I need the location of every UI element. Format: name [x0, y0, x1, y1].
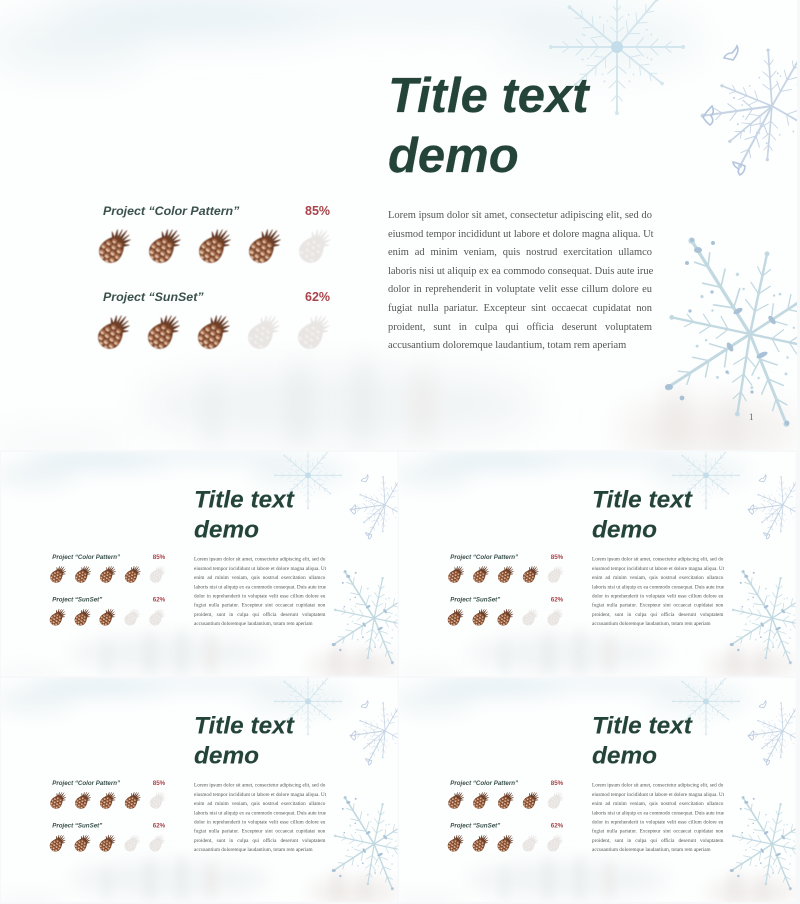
title: Title text	[592, 486, 692, 513]
text block: body copy: enim ad minim veniam, quis nostrud exercitation ullamco	[592, 801, 723, 806]
text block: body copy: fugiat nulla pariatur. Excepteur sint occaecat cupidatat non	[388, 303, 652, 314]
text block: body copy: fugiat nulla pariatur. Excepteur sint occaecat cupidatat non	[592, 603, 723, 608]
text block: body copy: proident, sunt in culpa qui officia deserunt voluptatem	[592, 612, 723, 617]
value: 62%: 62%	[551, 596, 563, 603]
text block: body copy: accusantium doloremque laudantium, totam rem aperiam	[592, 847, 711, 853]
text block: body copy	[194, 556, 326, 627]
text block: body copy	[194, 782, 326, 853]
title: demo	[592, 742, 657, 769]
icon row: pine cones	[448, 566, 564, 626]
text block: body copy: Lorem ipsum dolor sit amet, consectetur adipiscing elit, sed do	[194, 782, 325, 788]
panel: main slide	[0, 0, 800, 450]
title: demo	[388, 128, 519, 182]
text block: body copy: Lorem ipsum dolor sit amet, consectetur adipiscing elit, sed do	[388, 210, 652, 221]
text block: body copy: proident, sunt in culpa qui officia deserunt voluptatem	[592, 838, 723, 843]
title: Title text	[592, 712, 692, 739]
label: project Color Pattern: Project “Color Pattern”	[450, 553, 518, 560]
title	[592, 486, 693, 543]
label: project Color Pattern: Project “Color Pattern”	[52, 553, 120, 560]
text block: body copy: laboris nisi ut aliquip ex ea commodo consequat. Duis aute irue	[592, 584, 724, 590]
text block: body copy: fugiat nulla pariatur. Excepteur sint occaecat cupidatat non	[194, 829, 325, 834]
title	[592, 712, 693, 769]
title	[194, 712, 295, 769]
value: 62%: 62%	[305, 290, 330, 304]
value: 85%: 85%	[153, 553, 165, 560]
text block: body copy: eiusmod tempor incididunt ut labore et dolore magna aliqua. Ut	[388, 229, 654, 240]
icon row: pine cones	[448, 792, 564, 852]
text block: body copy: Lorem ipsum dolor sit amet, consectetur adipiscing elit, sed do	[592, 556, 723, 562]
text block: body copy: enim ad minim veniam, quis nostrud exercitation ullamco	[388, 247, 652, 258]
text block: body copy: proident, sunt in culpa qui officia deserunt voluptatem	[194, 838, 325, 843]
text block: body copy: Lorem ipsum dolor sit amet, consectetur adipiscing elit, sed do	[592, 782, 723, 788]
text block: body copy: fugiat nulla pariatur. Excepteur sint occaecat cupidatat non	[194, 603, 325, 608]
text block: body copy: accusantium doloremque laudantium, totam rem aperiam	[592, 621, 711, 627]
title: Title text	[194, 712, 294, 739]
text block: body copy: laboris nisi ut aliquip ex ea commodo consequat. Duis aute irue	[194, 810, 326, 816]
text block: body copy: dolor in reprehenderit in voluptate velit esse cillum dolore eu	[388, 284, 652, 295]
title: demo	[194, 742, 259, 769]
panel: thumbnail bottom left	[1, 678, 399, 902]
text block: body copy: proident, sunt in culpa qui officia deserunt voluptatem	[388, 322, 652, 333]
text block: body copy: enim ad minim veniam, quis nostrud exercitation ullamco	[194, 801, 325, 806]
text block: body copy: laboris nisi ut aliquip ex ea commodo consequat. Duis aute irue	[194, 584, 326, 590]
text block: body copy	[592, 782, 724, 853]
text block: body copy: dolor in reprehenderit in voluptate velit esse cillum dolore eu	[194, 819, 325, 825]
label: project SunSet: Project “SunSet”	[52, 822, 102, 829]
text block: body copy: enim ad minim veniam, quis nostrud exercitation ullamco	[592, 575, 723, 580]
label: project SunSet: Project “SunSet”	[52, 596, 102, 603]
panel: thumbnail top left	[1, 452, 399, 676]
text block: body copy: accusantium doloremque laudantium, totam rem aperiam	[194, 621, 313, 627]
title: demo	[194, 516, 259, 543]
text block: body copy: laboris nisi ut aliquip ex ea commodo consequat. Duis aute irue	[592, 810, 724, 816]
value: 85%: 85%	[305, 204, 330, 218]
text block: body copy: eiusmod tempor incididunt ut labore et dolore magna aliqua. Ut	[592, 566, 724, 571]
title	[194, 486, 295, 543]
label: project Color Pattern: Project “Color Pattern”	[103, 204, 239, 218]
icon row: pine cones	[97, 228, 330, 350]
label: project SunSet: Project “SunSet”	[450, 596, 500, 603]
value: 62%: 62%	[153, 596, 165, 603]
value: 62%: 62%	[551, 822, 563, 829]
label: project Color Pattern: Project “Color Pattern”	[450, 779, 518, 786]
value: 85%: 85%	[551, 553, 563, 560]
label: project Color Pattern: Project “Color Pattern”	[52, 779, 120, 786]
text block: body copy: fugiat nulla pariatur. Excepteur sint occaecat cupidatat non	[592, 829, 723, 834]
text block: body copy: eiusmod tempor incididunt ut labore et dolore magna aliqua. Ut	[592, 792, 724, 797]
value: 85%: 85%	[551, 779, 563, 786]
text block: body copy: dolor in reprehenderit in voluptate velit esse cillum dolore eu	[592, 593, 723, 599]
text block: body copy	[592, 556, 724, 627]
text block: body copy: eiusmod tempor incididunt ut labore et dolore magna aliqua. Ut	[194, 566, 326, 571]
title: Title text	[388, 69, 589, 123]
panel: thumbnail top right	[399, 452, 797, 676]
text block: body copy: accusantium doloremque laudantium, totam rem aperiam	[388, 340, 626, 351]
text block: body copy	[388, 210, 654, 351]
text block: body copy: dolor in reprehenderit in voluptate velit esse cillum dolore eu	[592, 819, 723, 825]
title: Title text	[194, 486, 294, 513]
text block: body copy: accusantium doloremque laudantium, totam rem aperiam	[194, 847, 313, 853]
text block: body copy: laboris nisi ut aliquip ex ea commodo consequat. Duis aute irue	[388, 266, 653, 277]
title: demo	[592, 516, 657, 543]
text block: body copy: enim ad minim veniam, quis nostrud exercitation ullamco	[194, 575, 325, 580]
panel: thumbnail bottom right	[399, 678, 797, 902]
label: project SunSet: Project “SunSet”	[450, 822, 500, 829]
page number: 1	[749, 412, 754, 422]
value: 62%: 62%	[153, 822, 165, 829]
text block: body copy: eiusmod tempor incididunt ut labore et dolore magna aliqua. Ut	[194, 792, 326, 797]
text block: body copy: Lorem ipsum dolor sit amet, consectetur adipiscing elit, sed do	[194, 556, 325, 562]
title	[388, 69, 590, 182]
icon row: pine cones	[50, 566, 166, 626]
text block: body copy: dolor in reprehenderit in voluptate velit esse cillum dolore eu	[194, 593, 325, 599]
text block: body copy: proident, sunt in culpa qui officia deserunt voluptatem	[194, 612, 325, 617]
label: project SunSet: Project “SunSet”	[103, 290, 204, 304]
value: 85%: 85%	[153, 779, 165, 786]
icon row: pine cones	[50, 792, 166, 852]
